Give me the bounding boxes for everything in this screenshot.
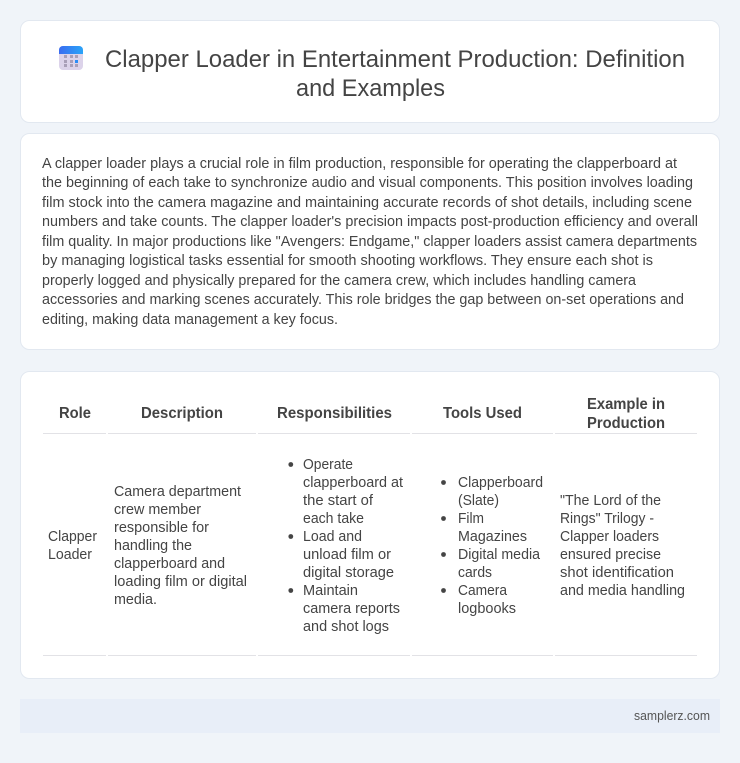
- cell: description: responsible for: [114, 520, 209, 536]
- cell: tools list: logbooks: [458, 601, 516, 617]
- cell: responsibilities list: [288, 457, 403, 635]
- text block: description paragraph: by managing logistical tasks essential for smooth shooting workflows. They ensure each shot is: [42, 253, 653, 269]
- panel: title card: [20, 20, 720, 122]
- cell: production example: Clapper loaders: [560, 529, 659, 545]
- title: [105, 46, 685, 102]
- table header: [43, 396, 697, 434]
- cell: production example: [560, 493, 685, 599]
- cell: tools list: (Slate): [458, 493, 499, 509]
- cell: tools list: cards: [458, 565, 492, 581]
- cell: description: media.: [114, 592, 157, 608]
- text block: description paragraph: [42, 156, 698, 328]
- table header: Production: [587, 415, 665, 432]
- cell: description: loading film or digital: [114, 574, 247, 590]
- cell: description: crew member: [114, 502, 201, 518]
- cell: tools list: Film: [458, 511, 484, 527]
- cell: production example: shot identification: [560, 565, 674, 581]
- table header: Description: [141, 405, 223, 422]
- cell: tools list: Digital media: [458, 547, 541, 563]
- cell: description: handling the: [114, 538, 192, 554]
- table header: Example in: [587, 396, 665, 413]
- table header: Responsibilities: [277, 405, 392, 422]
- panel: introduction text: [20, 134, 720, 350]
- cell: production example: ensured precise: [560, 547, 661, 563]
- panel: role table: [20, 372, 720, 678]
- cell: responsibilities list: and shot logs: [303, 619, 389, 635]
- cell: tools list: [441, 475, 543, 617]
- text block: description paragraph: film quality. In major productions like "Avengers: Endgame," clapper loaders assist camera departments: [42, 234, 697, 250]
- text block: description paragraph: numbers and take counts. The clapper loader's precision impacts post-production efficiency and overall: [42, 214, 698, 230]
- text block: description paragraph: the beginning of each take to synchronize audio and visual components. This position involves loading: [42, 175, 693, 191]
- cell: responsibilities list: clapperboard at: [303, 475, 403, 491]
- cell: role: Loader: [48, 547, 92, 563]
- footer: samplerz.com: [634, 709, 710, 723]
- cell: description: Camera department: [114, 484, 241, 500]
- cell: role: [48, 529, 97, 563]
- text block: description paragraph: accessories and marking scenes accurately. This role bridges the gap between on-set operations and: [42, 292, 684, 308]
- table header: Tools Used: [443, 405, 522, 422]
- cell: description: clapperboard and: [114, 556, 225, 572]
- cell: responsibilities list: Maintain: [303, 583, 358, 599]
- text block: description paragraph: properly logged and physically prepared for the camera crew, which includes handling camera: [42, 273, 637, 289]
- cell: tools list: Magazines: [458, 529, 527, 545]
- text block: description paragraph: A clapper loader plays a crucial role in film production, responsible for operating the clapperboard at: [42, 156, 677, 172]
- icon: calendar grid: [59, 46, 83, 70]
- cell: responsibilities list: each take: [303, 511, 364, 527]
- text block: description paragraph: film stock into the camera magazine and maintaining accurate records of shot details, including scene: [42, 195, 692, 211]
- cell: responsibilities list: unload film or: [303, 547, 391, 563]
- footer: [20, 699, 720, 733]
- cell: role: Clapper: [48, 529, 97, 545]
- cell: responsibilities list: camera reports: [303, 601, 400, 617]
- cell: tools list: Clapperboard: [458, 475, 543, 491]
- cell: production example: "The Lord of the: [560, 493, 661, 509]
- cell: production example: Rings" Trilogy -: [560, 511, 654, 527]
- cell: responsibilities list: Operate: [303, 457, 353, 473]
- cell: responsibilities list: digital storage: [303, 565, 394, 581]
- table header: Role: [59, 405, 91, 422]
- title: Clapper Loader in Entertainment Production: Definition: [105, 46, 685, 73]
- cell: tools list: Camera: [458, 583, 508, 599]
- cell: responsibilities list: Load and: [303, 529, 362, 545]
- cell: description: [114, 484, 247, 608]
- cell: production example: and media handling: [560, 583, 685, 599]
- cell: responsibilities list: the start of: [303, 493, 374, 509]
- title: and Examples: [296, 75, 445, 102]
- text block: description paragraph: editing, making data management a key focus.: [42, 312, 338, 328]
